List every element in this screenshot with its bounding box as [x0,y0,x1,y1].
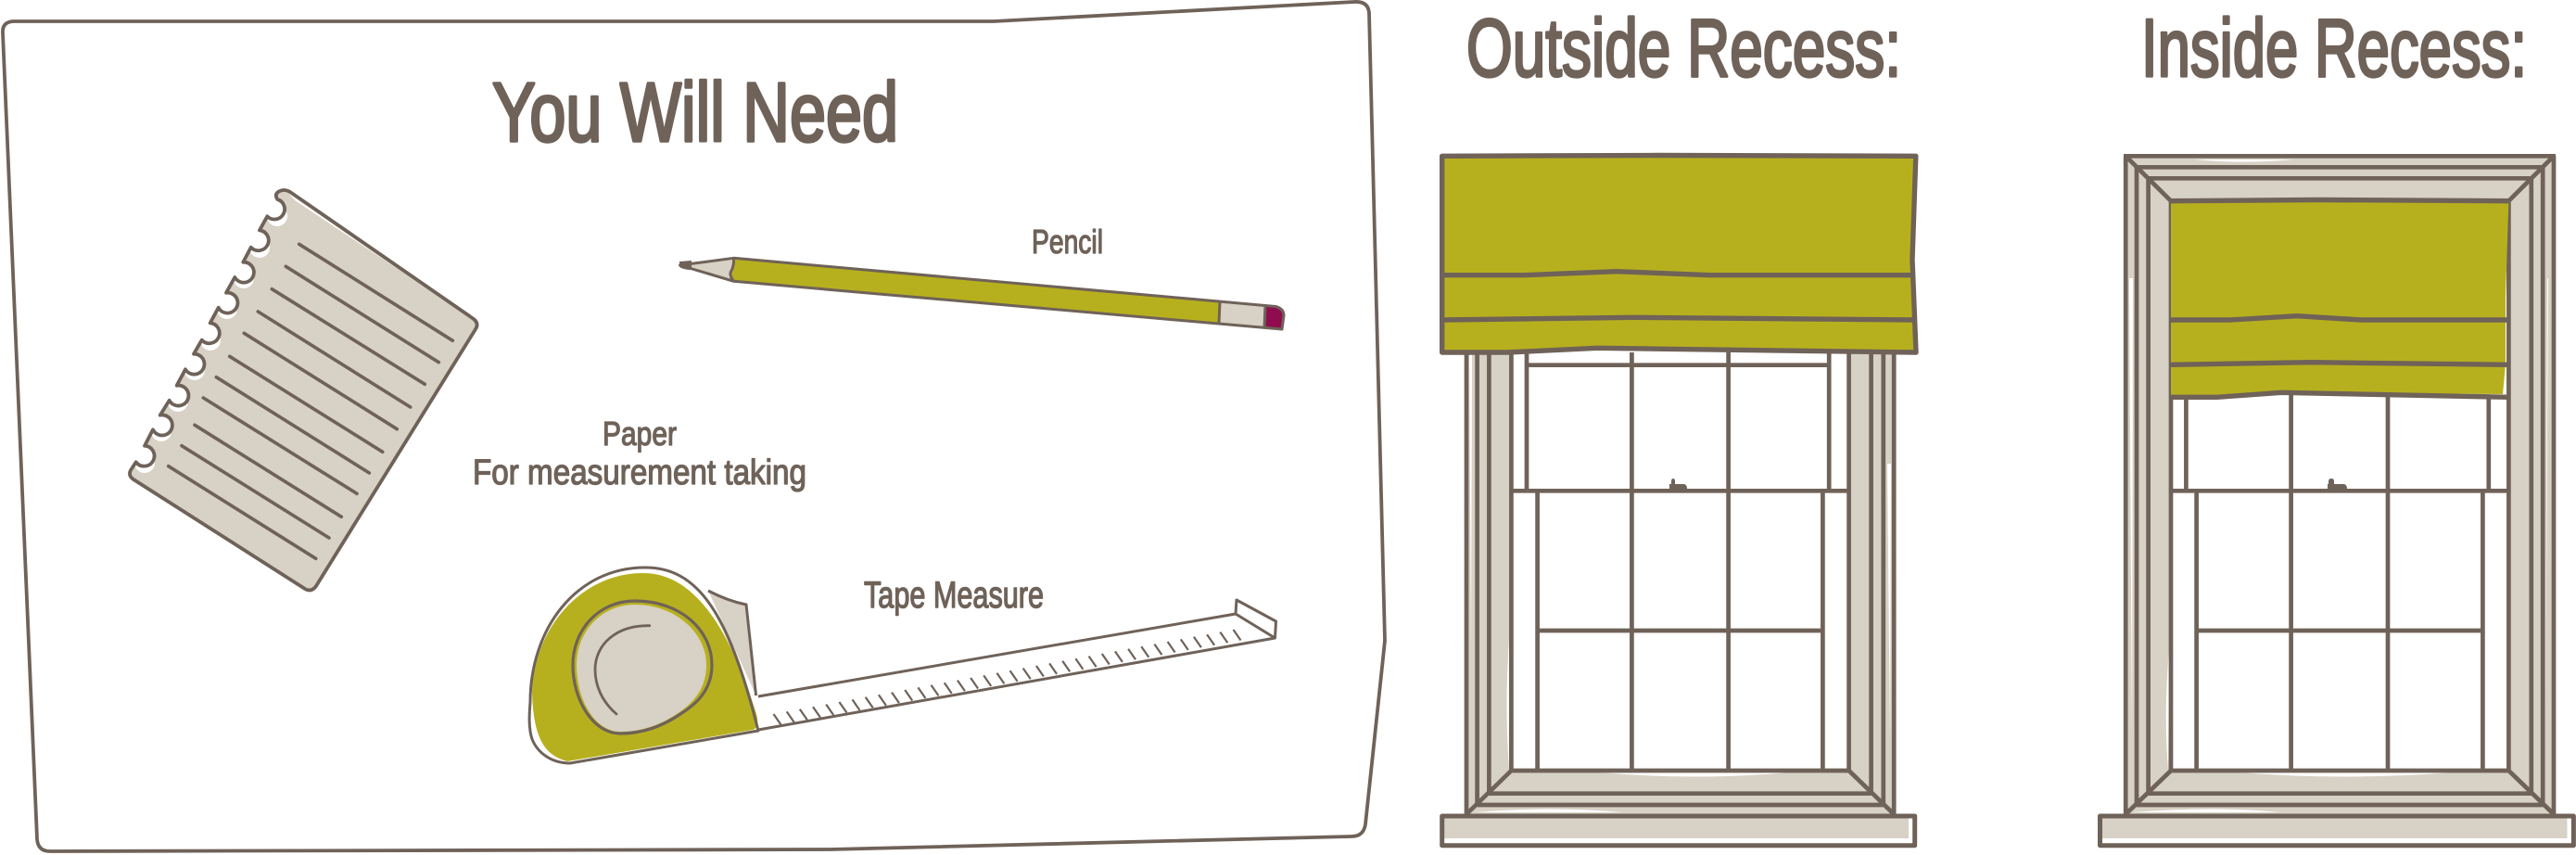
roman blind [1442,155,1916,352]
icon: notepaper [130,190,477,590]
label: for measurement taking: For measurement taking [473,453,806,492]
icon: tape measure [529,568,1275,763]
window sashes [2171,392,2508,771]
heading: outside recess: Outside Recess: [1466,2,1901,94]
window sill [1442,816,1915,846]
roman blind [2171,200,2508,397]
window sill [2100,816,2573,846]
window frame [2124,156,2556,816]
panel outline [3,2,1385,851]
window sashes [1511,352,1849,771]
label: tape measure: Tape Measure [864,575,1044,616]
label: pencil: Pencil [1032,223,1103,261]
illustration: inside recess window [2100,156,2573,846]
heading: you will need: You Will Need [492,67,898,160]
label: paper: Paper [603,415,677,453]
window frame [1466,352,1894,814]
illustration: outside recess window [1442,155,1916,846]
window latch [1669,479,1687,489]
window latch [2328,479,2347,489]
icon: pencil [679,258,1284,329]
panel: you will need [3,2,1385,851]
